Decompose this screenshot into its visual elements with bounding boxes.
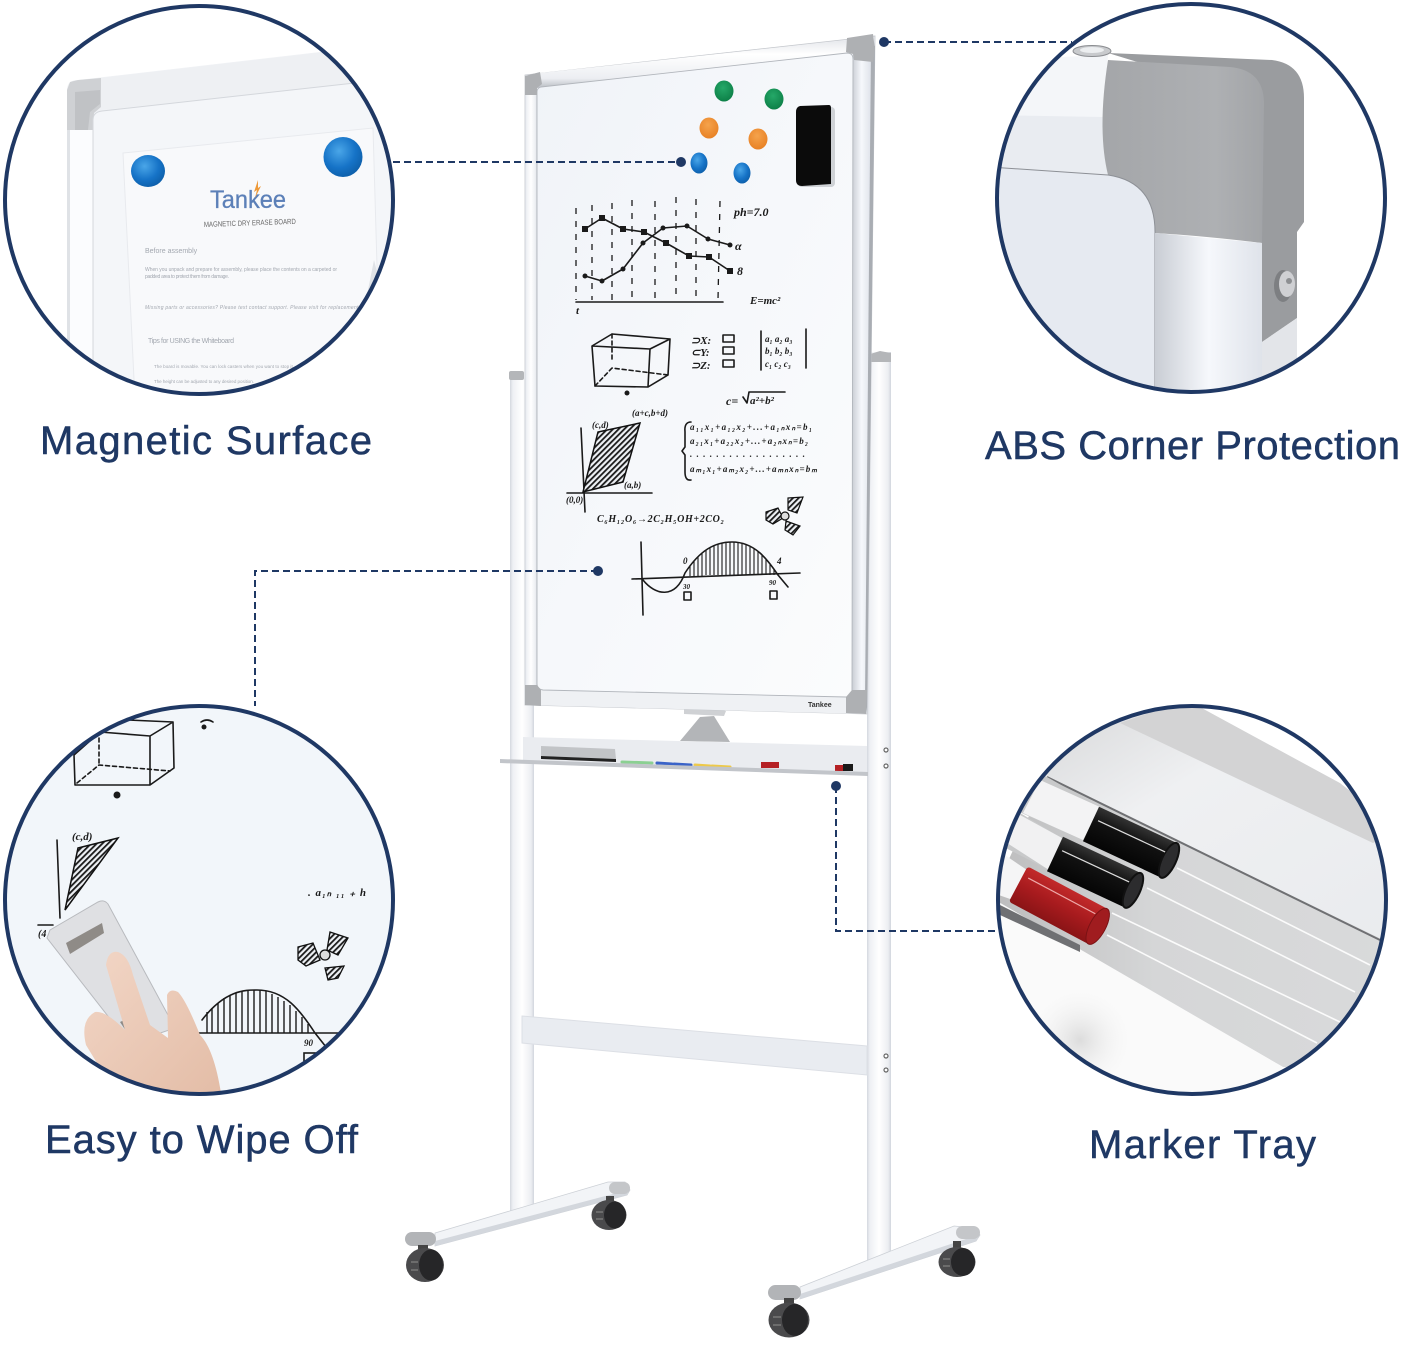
tray back	[523, 737, 867, 773]
left front caster	[406, 1245, 444, 1282]
wiped equation: . a₁ₙ ₁₁ ₊ h	[308, 887, 366, 899]
cross bar	[522, 1016, 867, 1075]
sheet text: When you unpack and prepare for assembly, please place the contents on a carpeted or	[145, 267, 337, 273]
sheet text: padded area to protect them from damage.	[145, 274, 229, 280]
hand eraser	[47, 901, 175, 1040]
drawing: area under curve: 4	[776, 556, 782, 566]
drawing: line chart: α	[735, 239, 742, 253]
top rail	[1018, 55, 1108, 117]
brand mark: Tankee	[808, 702, 832, 709]
sheet text: The board is movable. You can lock casters when you want to stop it.	[154, 364, 294, 369]
gray corner guard	[1102, 60, 1264, 243]
drawing: XYZ boxes: ⊂Y:	[691, 347, 710, 359]
pivot bracket	[680, 706, 730, 742]
writing surface	[537, 53, 853, 697]
circle outline	[998, 706, 1386, 1094]
right base	[768, 1226, 980, 1338]
side bracket lower	[1262, 318, 1297, 376]
drawing: parallelogram graph	[566, 408, 668, 512]
drawing: area under curve: 90	[769, 579, 776, 587]
hand	[84, 952, 222, 1100]
drawing: matrix: c₁ c₂ c₃	[765, 359, 791, 369]
sheet text: The height can be adjusted to any desired position.	[154, 379, 254, 384]
drawing: line chart	[576, 197, 781, 317]
tray magnets	[622, 762, 730, 767]
eraser	[796, 105, 835, 187]
paper sheet	[123, 128, 378, 400]
tray lip	[500, 759, 868, 776]
fan	[298, 932, 348, 980]
tray trough	[1000, 784, 1380, 1068]
left rear caster	[592, 1196, 626, 1230]
outer gray shell	[1108, 53, 1304, 342]
drawing: linear equations: a₂₁x₁+a₂₂x₂+...+a₂ₙxₙ=b₂	[690, 436, 808, 446]
sheet text: Before assembly	[145, 248, 198, 255]
whiteboard stand	[405, 351, 980, 1338]
hatched curve	[198, 989, 338, 1062]
left rail	[525, 92, 537, 690]
bolt holes	[884, 748, 888, 1072]
whiteboard	[525, 34, 875, 714]
drawing: linear equations	[682, 422, 817, 480]
corner guard	[67, 78, 101, 130]
top rail	[537, 40, 852, 88]
drawing: linear equations: aₘ₁x₁+aₘ₂x₂+...+aₘₙxₙ=bₘ	[690, 464, 817, 474]
wiped cube	[74, 720, 213, 798]
right post cap	[867, 351, 891, 362]
bottom rail	[525, 690, 866, 714]
blue magnets	[131, 155, 165, 187]
drawing: area under curve: 30	[682, 583, 690, 591]
left post	[510, 372, 534, 1212]
tray edge	[1047, 777, 1380, 940]
right side edge	[852, 46, 871, 700]
drawing: parallelogram graph: (0,0)	[566, 495, 583, 505]
tray back panel	[1046, 713, 1384, 938]
frame	[67, 52, 322, 114]
drawing: line chart: t	[576, 305, 580, 317]
drawing: parallelogram graph: (a+c,b+d)	[632, 408, 668, 418]
drawing: parallelogram graph: (a,b)	[624, 480, 641, 490]
top rail	[100, 45, 400, 110]
drawing: root formula: c=	[726, 394, 738, 408]
panel: magnetic surface	[0, 0, 400, 400]
board frame	[525, 36, 875, 714]
drawing: line chart: ph=7.0	[733, 205, 769, 219]
logo spark	[254, 180, 261, 198]
sheet text: Missing parts or accessories? Please text contact support. Please visit for replacement.	[145, 305, 360, 311]
board surface	[92, 83, 352, 360]
left base	[405, 1182, 630, 1282]
heading: marker tray: Marker Tray	[1089, 1123, 1316, 1167]
heading: magnetic surface: Magnetic Surface	[40, 419, 372, 463]
drawing: chemical equation: C₆H₁₂O₆→2C₂H₅OH+2CO₂	[597, 514, 724, 525]
black marker cap top	[1083, 807, 1183, 881]
drawing: cube	[592, 334, 670, 396]
drawing: XYZ boxes: ⊃Z:	[691, 360, 711, 372]
left rail	[70, 130, 92, 360]
sheet text: Tips for USING the Whiteboard	[148, 338, 234, 345]
drawing: linear equations: a₁₁x₁+a₁₂x₂+...+a₁ₙxₙ=b₁	[690, 422, 812, 432]
right post	[867, 352, 891, 1260]
leader: magnetic surface	[393, 157, 686, 167]
trough ridges	[1107, 868, 1370, 1043]
tray eraser	[541, 746, 616, 762]
marker bodies	[1000, 776, 1100, 899]
logo: Tankee	[210, 186, 286, 214]
upper gray band	[1120, 708, 1375, 843]
heading: easy to wipe off: Easy to Wipe Off	[45, 1118, 359, 1162]
drawing: linear equations: . . . . . . . . . . . . . . . . . .	[690, 449, 805, 459]
wiped graph	[38, 831, 118, 940]
drawing: radiation fan	[766, 497, 803, 535]
sheet text	[145, 248, 360, 384]
panel: marker tray	[990, 700, 1400, 1100]
corner guards	[525, 34, 875, 714]
drawing: matrix: a₁ a₂ a₃	[765, 334, 792, 344]
sheet title: MAGNETIC DRY ERASE BOARD	[204, 217, 296, 229]
drawing: area under curve: 0	[683, 556, 688, 566]
leader: wipe off	[255, 566, 603, 706]
drawing: line chart: 8	[737, 264, 743, 278]
drawing: matrix: b₁ b₂ b₃	[765, 346, 792, 356]
circle outline	[5, 6, 393, 394]
drawing: area under curve	[632, 542, 800, 615]
panel: easy to wipe off	[0, 700, 400, 1100]
panel: ABS corner protection	[990, 0, 1400, 400]
right rear caster	[938, 1241, 976, 1277]
wiped graph: (c,d)	[72, 831, 92, 843]
drawing: parallelogram graph: (c,d)	[592, 420, 609, 430]
drawing: XYZ boxes	[691, 335, 734, 372]
circle outline	[5, 706, 393, 1094]
right front caster	[768, 1298, 810, 1338]
wiped graph: (4	[38, 929, 46, 940]
drawing: XYZ boxes: ⊃X:	[691, 335, 711, 347]
bolt	[1274, 270, 1295, 302]
magnets	[690, 80, 784, 184]
black marker cap lower	[1047, 837, 1147, 911]
circle outline	[997, 4, 1385, 392]
left post cap	[509, 371, 524, 380]
drawing: root formula: a²+b²	[750, 395, 775, 407]
marker tray	[500, 737, 868, 776]
drawing: line chart: E=mc²	[749, 295, 781, 307]
red marker cap	[1009, 866, 1114, 948]
leader: marker tray	[831, 781, 998, 931]
heading: ABS corner protection: ABS Corner Protection	[985, 424, 1400, 468]
leader: corner protection	[879, 37, 1072, 47]
drawing: matrix	[761, 329, 806, 370]
screw	[1073, 46, 1111, 56]
drawing: root formula	[726, 392, 785, 408]
board surface	[999, 167, 1156, 386]
tray markers	[761, 762, 853, 771]
tray lip	[1000, 902, 1278, 1064]
hatched curve: 90	[304, 1038, 314, 1048]
white corner outside band	[1203, 708, 1350, 790]
right rail	[1155, 233, 1262, 400]
